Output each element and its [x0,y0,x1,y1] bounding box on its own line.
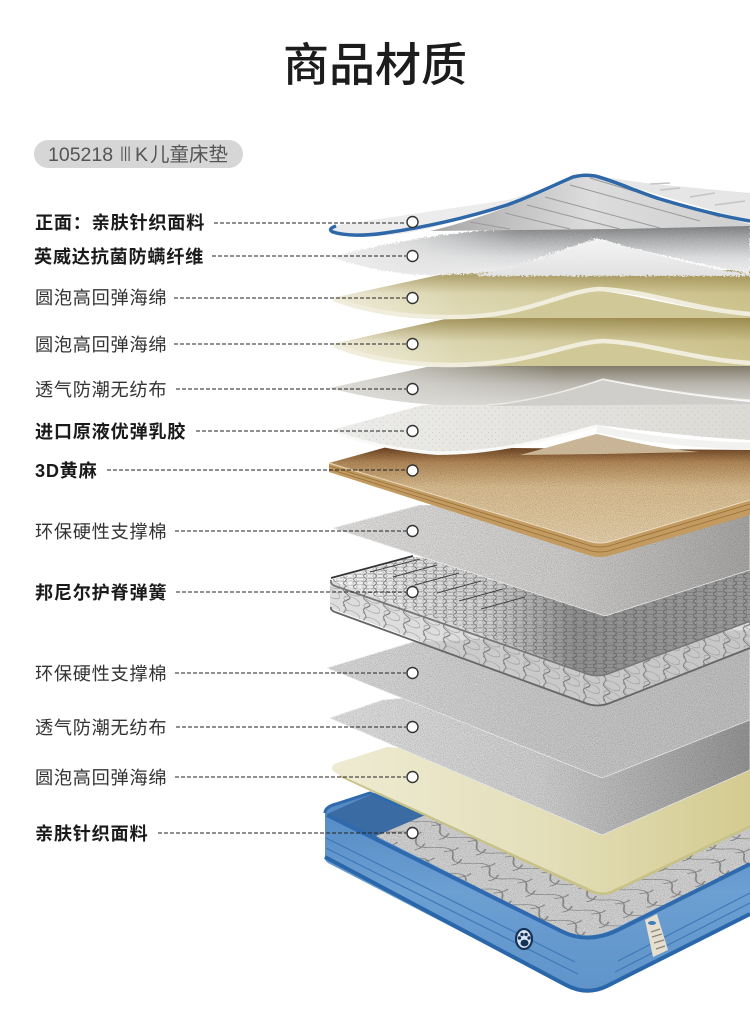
label: foam one: 圆泡高回弹海绵 [35,288,167,308]
label: non-woven upper [35,380,418,400]
model pill: 儿童床垫 [150,144,228,166]
model pill: K [135,144,148,166]
layer: non-woven sheet, upper [330,363,750,406]
label: spring [35,582,418,603]
label: support foam upper: 环保硬性支撑棉 [35,522,167,542]
label: non-woven upper: 透气防潮无纺布 [35,380,167,400]
layer: anti-mite fiber [333,224,750,276]
label: top fabric [35,213,418,233]
model pill [34,140,243,168]
icon: paw logo [516,929,532,949]
title: 商品材质 [283,39,467,91]
label: foam lower [35,768,418,788]
label: latex [35,421,418,442]
exploded mattress layers [325,175,750,992]
layer: cream foam, lower [332,747,750,895]
label: top fabric: 正面：亲肤针织面料 [35,213,205,233]
layer: foam, first [332,270,750,318]
layer: base mattress with blue border [325,770,750,992]
layer: 3D jute board [329,447,750,557]
label: foam two: 圆泡高回弹海绵 [35,335,167,355]
layer: support foam sheet, lower [327,630,750,778]
model pill: Ⅲ [120,144,132,166]
layer: top knit fabric with blue piping [331,175,750,236]
label: non-woven lower [35,718,418,738]
label: bottom fabric: 亲肤针织面料 [35,824,148,844]
label: foam two [35,335,418,355]
layer: foam, second [332,318,750,366]
label: anti-mite fiber [34,246,418,267]
layer: non-woven sheet, lower [330,670,750,835]
label: support foam lower: 环保硬性支撑棉 [35,664,167,684]
label: foam lower: 圆泡高回弹海绵 [35,768,167,788]
label: support foam upper [35,522,418,542]
label: 3D jute: 3D黄麻 [35,460,97,481]
layer: pocket spring frame [330,556,750,706]
model pill: 105218 [48,144,113,166]
label: non-woven lower: 透气防潮无纺布 [35,718,167,738]
label: bottom fabric [35,824,418,844]
label: foam one [35,288,418,308]
label: support foam lower [35,664,418,684]
layer: support foam sheet, upper [333,505,750,616]
label: latex: 进口原液优弹乳胶 [35,421,186,442]
label: anti-mite fiber: 英威达抗菌防螨纤维 [34,246,204,267]
label: 3D jute [35,460,418,481]
sewn label tag [645,914,668,957]
layer: latex [332,403,750,455]
label: spring: 邦尼尔护脊弹簧 [35,582,167,603]
